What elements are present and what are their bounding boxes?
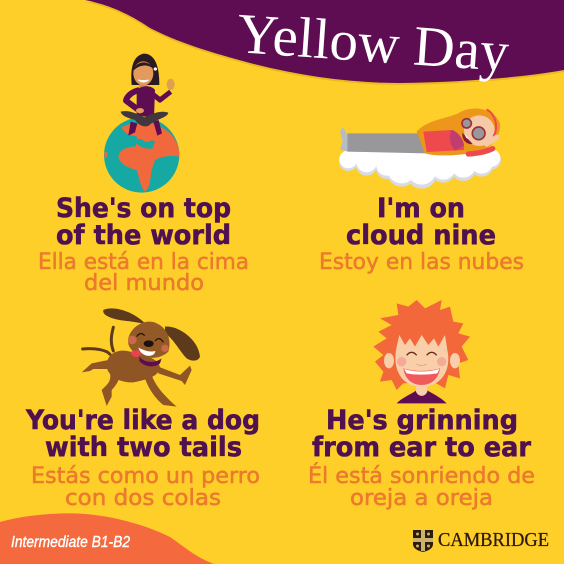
text block: ear to ear: Él está sonriendo de [308,463,535,489]
mouth [403,368,440,385]
Cambridge logo: CAMBRIDGE [438,530,549,551]
cheeks [128,336,137,344]
nose [417,364,427,366]
text block: dog with two tails: Estás como un perro [31,464,260,489]
legs [121,111,168,126]
shirt [397,390,447,403]
text block: ear to ear [308,405,535,511]
head [128,322,170,358]
text block: cloud nine: cloud nine [346,220,496,251]
arm [468,149,493,154]
mouth [138,348,155,356]
hair back [417,108,500,155]
face [464,115,495,146]
icon: woman on top of the world [104,54,179,193]
torso [137,86,155,118]
neck and face [139,82,147,89]
globe [104,117,179,193]
eyes [407,352,417,355]
text block: ear to ear: He's grinning [326,405,518,436]
text block: dog with two tails: con dos colas [65,486,221,511]
eyes [137,334,145,337]
hair band [487,109,496,137]
hand [167,79,175,90]
text block: dog with two tails [25,405,260,511]
body [423,130,464,152]
arms [126,90,139,111]
icon: person on cloud nine [339,108,501,189]
text block: top of the world: Ella está en la cima [38,250,249,275]
cloud [339,149,501,189]
text block: ear to ear: oreja a oreja [350,486,493,511]
text block: top of the world: del mundo [84,271,204,296]
legs [82,360,108,372]
legs [347,133,426,153]
body [107,351,160,382]
text block: cloud nine: Estoy en las nubes [319,250,524,275]
tails [83,349,110,354]
ears [103,308,145,323]
text block: top of the world [38,193,249,296]
cheeks [397,357,406,366]
tongue [131,350,142,357]
title: Yellow Day [235,2,511,84]
hair [131,54,159,85]
face [395,335,448,387]
neck [416,383,427,396]
collar [139,357,162,366]
level label: Intermediate B1-B2 [11,534,130,551]
icon: shield [413,530,433,552]
text block: cloud nine [319,193,524,275]
text block: top of the world: of the world [56,220,231,251]
sunglasses [462,119,471,128]
header band [85,0,564,85]
text block: dog with two tails: with two tails [45,432,242,463]
icon: grinning boy [373,300,470,403]
hair [373,300,470,390]
text block: dog with two tails: You're like a dog [25,405,260,436]
nose [144,340,154,347]
icon: happy dog [82,308,200,407]
level badge [0,513,214,564]
text block: ear to ear: from ear to ear [312,432,532,463]
text block: cloud nine: I'm on [377,193,465,224]
text block: top of the world: She's on top [56,193,231,224]
ears [384,353,394,368]
